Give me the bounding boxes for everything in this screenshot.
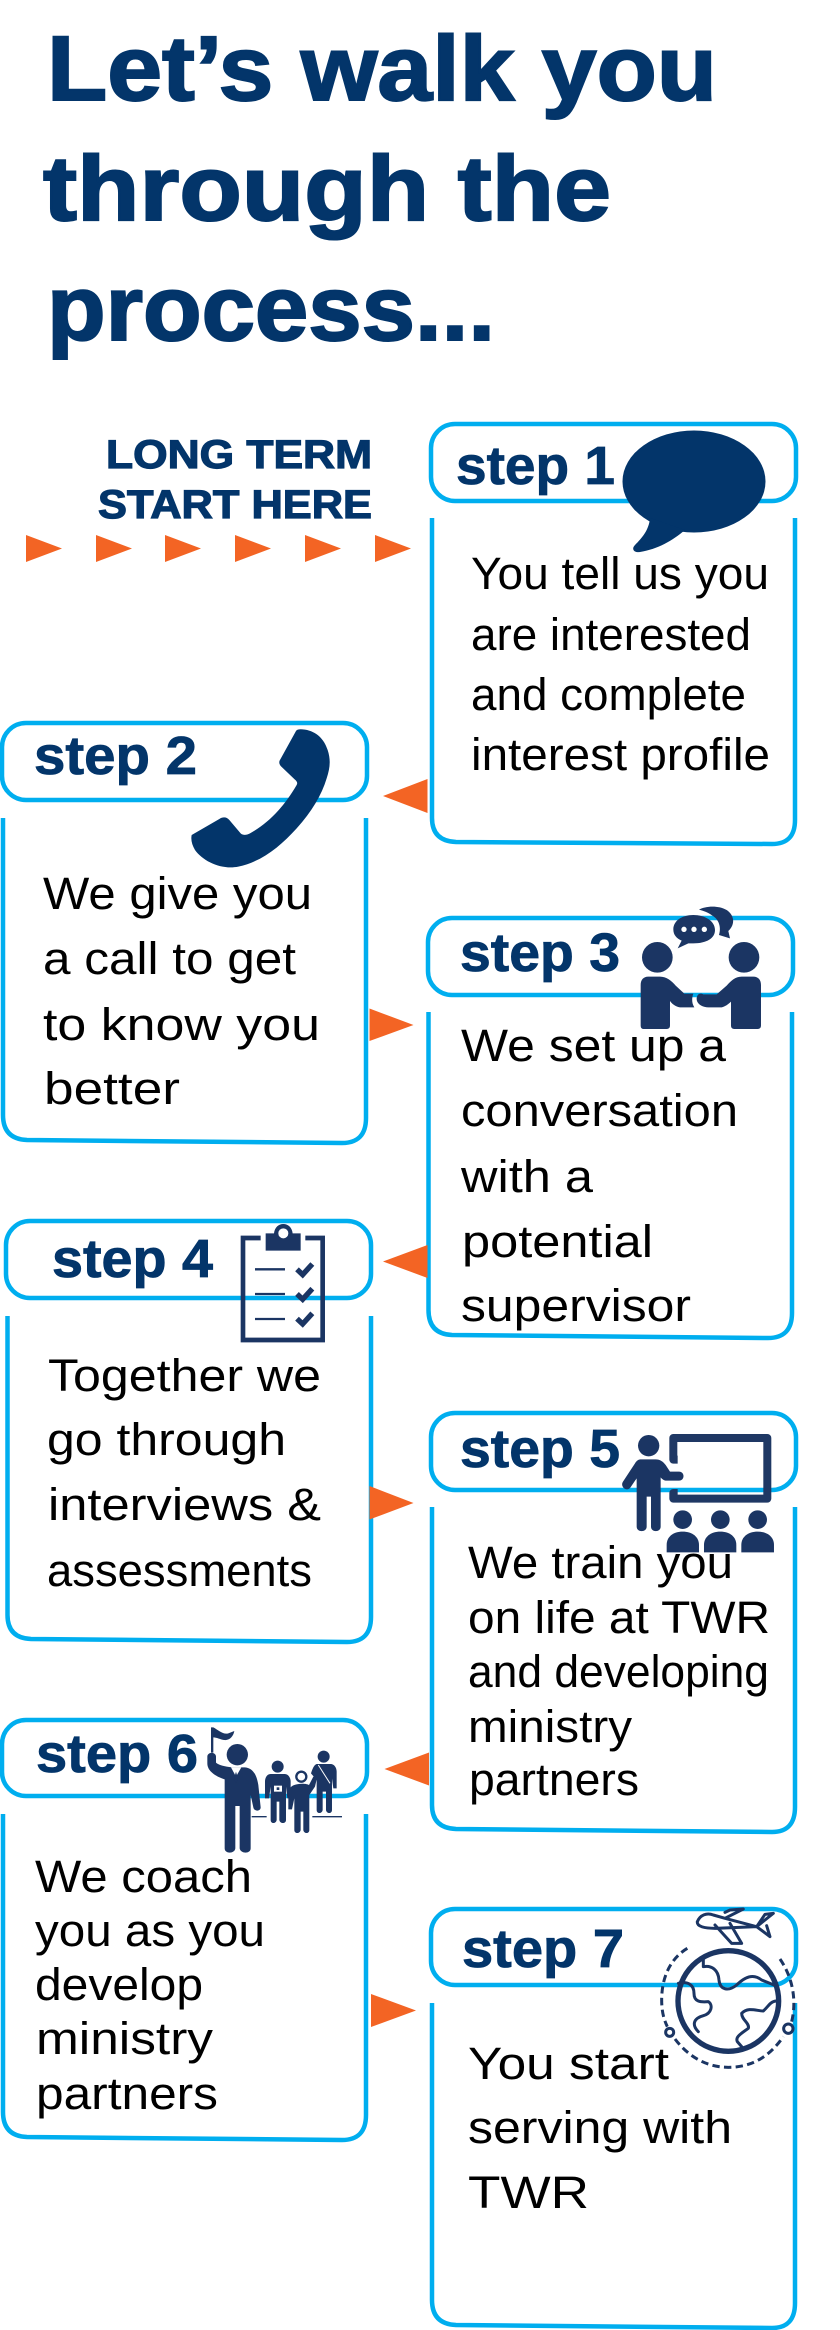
- step 4 description: Together we: [48, 1350, 321, 1401]
- panel: step 1: step 1: [456, 436, 615, 496]
- panel: step 4: step 4: [52, 1229, 213, 1289]
- title: Let’s walk you: [47, 18, 717, 120]
- step 5 description: partners: [469, 1754, 639, 1805]
- title: [43, 18, 717, 360]
- panel: step 6: step 6: [36, 1724, 198, 1784]
- arrow: step 1 to step 2: [383, 779, 428, 813]
- step 3 description: conversation: [461, 1085, 738, 1136]
- panel: step 5: [431, 1413, 796, 1832]
- step 4 description: interviews &: [48, 1479, 321, 1530]
- panel: step 3: step 3: [460, 923, 620, 983]
- step 4 description: go through: [47, 1414, 286, 1465]
- step 7 description: TWR: [468, 2167, 589, 2218]
- panel: step 3: [428, 918, 793, 1338]
- arrow: step 6 to step 7: [371, 1994, 416, 2027]
- step 1 description: and complete: [471, 669, 746, 720]
- icon: trainer at board with audience: [622, 1435, 774, 1552]
- step 3 description: potential: [462, 1216, 653, 1267]
- arrow: step 5 to step 6: [384, 1752, 429, 1786]
- step 6 description: you as you: [35, 1905, 265, 1956]
- icon: telephone: [191, 729, 330, 867]
- step 5 description: We train you: [468, 1537, 733, 1588]
- step 2 description: better: [44, 1063, 180, 1114]
- panel: step 7: [431, 1909, 796, 2328]
- icon: speech bubble: [622, 430, 766, 552]
- step 7 description: [468, 2038, 732, 2218]
- step 6 description: We coach: [35, 1851, 252, 1902]
- step 7 description: You start: [468, 2038, 670, 2089]
- title: process...: [47, 258, 495, 360]
- icon: clipboard checklist: [243, 1224, 323, 1340]
- step 6 description: develop: [35, 1959, 203, 2010]
- start here label: [98, 433, 372, 527]
- icon: globe with airplane: [662, 1909, 794, 2067]
- title: through the: [43, 138, 611, 240]
- step 7 description: serving with: [468, 2102, 732, 2153]
- panel: step 5: step 5: [460, 1419, 620, 1479]
- step 3 description: with a: [460, 1151, 594, 1202]
- step 3 description: supervisor: [461, 1280, 691, 1331]
- step 3 description: We set up a: [461, 1020, 727, 1071]
- arrow: step 3 to step 4: [383, 1245, 428, 1278]
- step 5 description: and developing: [468, 1646, 769, 1697]
- step 6 description: ministry: [36, 2013, 214, 2064]
- step 1 description: are interested: [471, 609, 751, 660]
- step 2 description: a call to get: [43, 933, 297, 984]
- panel: step 1: [431, 424, 796, 844]
- step 5 description: [468, 1537, 770, 1805]
- step 5 description: on life at TWR: [468, 1592, 770, 1643]
- step 2 description: We give you: [43, 868, 312, 919]
- step 2 description: [43, 868, 320, 1114]
- step 2 description: to know you: [43, 999, 320, 1050]
- step 5 description: ministry: [468, 1701, 633, 1752]
- start here label: START HERE: [98, 483, 372, 527]
- step 6 description: partners: [36, 2068, 218, 2119]
- step 4 description: assessments: [47, 1545, 312, 1596]
- panel: step 2: [2, 723, 367, 1143]
- arrow: step 4 to step 5: [370, 1486, 414, 1520]
- step 1 description: You tell us you: [471, 548, 769, 599]
- arrow row: start pointing to step 1: [26, 535, 411, 562]
- icon: two people talking: [641, 907, 761, 1029]
- panel: step 7: step 7: [462, 1919, 624, 1979]
- step 1 description: [471, 548, 770, 780]
- step 3 description: [460, 1020, 738, 1331]
- panel: step 6: [2, 1720, 367, 2140]
- panel: step 2: step 2: [34, 726, 197, 786]
- start here label: LONG TERM: [106, 433, 372, 477]
- step 4 description: [47, 1350, 321, 1596]
- step 6 description: [35, 1851, 265, 2119]
- panel: step 4: [6, 1221, 371, 1642]
- arrow: step 2 to step 3: [370, 1008, 414, 1041]
- step 1 description: interest profile: [471, 729, 770, 780]
- icon: guide with flag leading group: [207, 1727, 342, 1853]
